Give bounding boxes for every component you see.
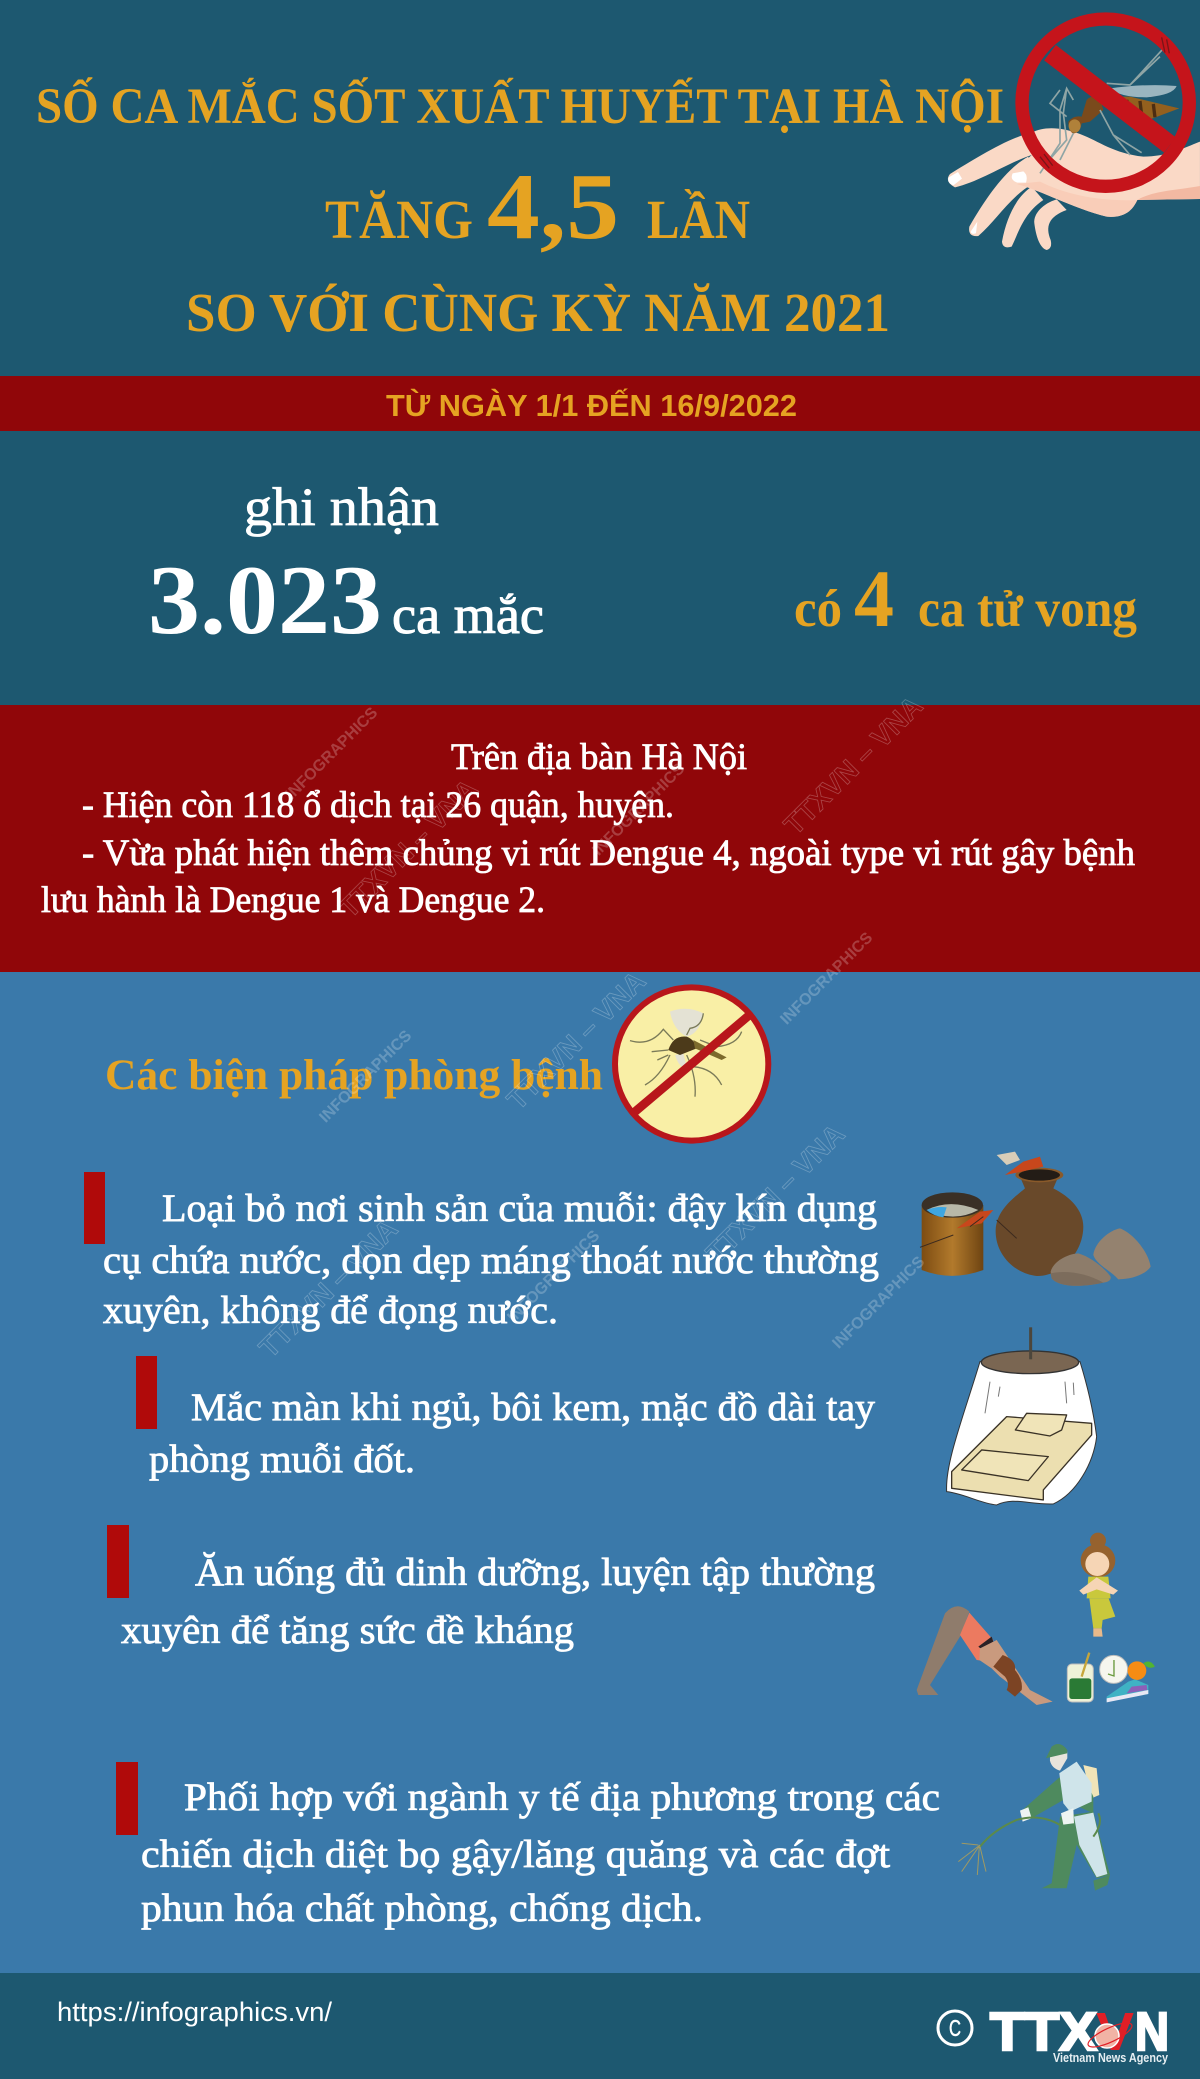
logo: TTXVN: V — [1096, 2002, 1134, 2062]
text — [103, 1187, 879, 1332]
text: cụ chứa nước, dọn dẹp máng thoát nước thường — [103, 1239, 879, 1282]
watermarks: TTXVN – VNA — [700, 1118, 851, 1269]
text: phòng muỗi đốt. — [149, 1438, 415, 1481]
stat: deaths: ca tử vong — [918, 580, 1137, 638]
source url: https://infographics.vn/ — [57, 1997, 332, 2027]
band: date range — [0, 376, 1200, 431]
watermarks: INFOGRAPHICS — [777, 929, 876, 1028]
woman in downward dog — [917, 1606, 1053, 1705]
text: xuyên, không để đọng nước. — [103, 1289, 558, 1332]
marker — [136, 1356, 157, 1429]
clock, orange and shoe — [1100, 1655, 1155, 1702]
marker — [116, 1762, 138, 1835]
text: chiến dịch diệt bọ gậy/lăng quăng và các đợt — [141, 1833, 890, 1876]
text — [149, 1386, 876, 1481]
text block: - Vừa phát hiện thêm chủng vi rút Dengue 4, ngoài type vi rút gây bệnh — [82, 833, 1135, 874]
copyright icon: C — [949, 2015, 961, 2041]
icon: no mosquito — [615, 987, 768, 1141]
measure 1 — [84, 1172, 879, 1332]
text: xuyên để tăng sức đề kháng — [121, 1609, 574, 1652]
panel: header — [0, 0, 1200, 376]
watermarks: TTXVN – VNA — [778, 690, 929, 841]
marker — [84, 1172, 105, 1244]
logo: TTXVN: TTX — [990, 2002, 1097, 2062]
title line 2: TĂNG — [325, 189, 473, 250]
panel: footer — [0, 1973, 1200, 2079]
icon: hand with crossed-out mosquito — [948, 19, 1200, 250]
watermarks: INFOGRAPHICS — [282, 704, 381, 803]
stat: deaths — [794, 553, 1137, 644]
date text: TỪ NGÀY 1/1 ĐẾN 16/9/2022 — [386, 387, 797, 423]
text: phun hóa chất phòng, chống dịch. — [141, 1887, 703, 1930]
text: Phối hợp với ngành y tế địa phương trong các — [184, 1776, 940, 1819]
prohibition sign — [1022, 19, 1189, 186]
mosquito — [1040, 45, 1179, 173]
icon: bucket, jar and stones — [920, 1152, 1151, 1286]
logo: TTXVN: Vietnam News Agency — [1053, 2050, 1169, 2065]
logo: TTXVN: N — [1135, 2002, 1169, 2062]
text block — [41, 737, 1135, 921]
marker — [107, 1525, 129, 1598]
stat: cases: ca mắc — [392, 585, 544, 645]
heading: Các biện pháp phòng bệnh — [105, 1052, 603, 1099]
title line 2: 4,5 — [487, 155, 619, 259]
text: Loại bỏ nơi sinh sản của muỗi: đậy kín dụng — [162, 1187, 877, 1230]
text — [141, 1776, 940, 1930]
juice jar — [1067, 1653, 1093, 1702]
stat: cases: ghi nhận — [244, 477, 439, 537]
title line 3: SO VỚI CÙNG KỲ NĂM 2021 — [186, 282, 890, 343]
panel: Hanoi situation — [0, 705, 1200, 972]
text — [121, 1551, 875, 1652]
panel: prevention measures — [0, 690, 1200, 1973]
icon: yoga, healthy food and exercise — [917, 1533, 1155, 1705]
text block: Trên địa bàn Hà Nội — [451, 737, 747, 778]
watermarks — [253, 690, 929, 1364]
title line 2: LẦN — [647, 189, 750, 250]
measure 3 — [107, 1525, 875, 1652]
stat: cases — [148, 477, 544, 655]
text: Ăn uống đủ dinh dưỡng, luyện tập thường — [195, 1551, 875, 1594]
text block: - Hiện còn 118 ổ dịch tại 26 quận, huyện. — [82, 785, 674, 826]
watermarks: INFOGRAPHICS — [504, 1227, 603, 1326]
logo: TTXVN — [990, 2002, 1169, 2065]
watermarks: INFOGRAPHICS — [589, 760, 688, 859]
girl in tree pose — [1079, 1533, 1118, 1637]
watermarks: INFOGRAPHICS — [316, 1027, 415, 1126]
copyright icon — [938, 2011, 972, 2045]
hand — [948, 128, 1200, 250]
measure 2 — [136, 1356, 876, 1481]
text: Mắc màn khi ngủ, bôi kem, mặc đồ dài tay — [191, 1386, 876, 1429]
watermarks: TTXVN – VNA — [501, 965, 652, 1116]
watermarks: TTXVN – VNA — [253, 1213, 404, 1364]
stat: cases: 3.023 — [148, 546, 382, 655]
text block: lưu hành là Dengue 1 và Dengue 2. — [41, 880, 545, 921]
title line 1: SỐ CA MẮC SỐT XUẤT HUYẾT TẠI HÀ NỘI — [36, 77, 1004, 135]
measure 4 — [116, 1762, 940, 1930]
icon: bed with mosquito net — [947, 1327, 1097, 1505]
watermarks: INFOGRAPHICS — [829, 1253, 928, 1352]
panel: key numbers — [0, 431, 1200, 705]
title line 2 — [325, 155, 750, 259]
icon: sprayer worker — [958, 1744, 1110, 1891]
stat: deaths: 4 — [854, 553, 894, 644]
watermarks: TTXVN – VNA — [333, 773, 484, 924]
stat: deaths: có — [794, 580, 842, 638]
